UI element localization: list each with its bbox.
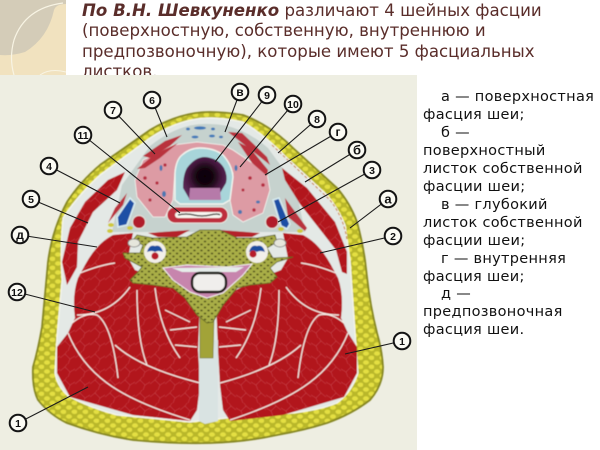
- veins at midline: [186, 126, 223, 138]
- legend text: фасция шеи.: [423, 322, 524, 338]
- jugular vein right: [273, 198, 290, 229]
- corner decoration: [0, 0, 66, 75]
- callout labels: 11: [77, 130, 89, 142]
- legend text: фасция шеи; поверхностный: [423, 107, 546, 159]
- nerves: [107, 223, 303, 233]
- jugular vein left: [117, 198, 135, 227]
- carotid right: [266, 216, 278, 228]
- callout labels: 10: [287, 99, 299, 111]
- callout labels: 1: [15, 418, 21, 430]
- callout labels: 7: [110, 105, 116, 117]
- heading text: (поверхностную, собственную, внутреннюю и: [82, 21, 486, 40]
- trachea: [175, 148, 233, 204]
- foramen left: [144, 241, 166, 263]
- thyroid vessels: [160, 165, 260, 214]
- callout labels: [11, 85, 405, 430]
- callout circles: [9, 84, 410, 431]
- callout labels: 12: [11, 287, 23, 299]
- central visceral compartment: [112, 124, 305, 232]
- callout labels: б: [353, 142, 361, 158]
- callout labels: 6: [149, 95, 155, 107]
- legend text: д —: [441, 286, 471, 302]
- thin orange superficial line: [272, 145, 347, 240]
- spinal cord: [192, 273, 226, 292]
- carotid left: [132, 216, 146, 228]
- legend text: б —: [441, 125, 470, 141]
- subcutaneous fat layer: [33, 112, 383, 443]
- callout labels: 8: [314, 114, 320, 126]
- foramen right: [246, 241, 268, 263]
- thyroid spots: [143, 163, 265, 212]
- callout labels: 5: [28, 194, 34, 206]
- sternocleidomastoid slips: [108, 193, 307, 231]
- back muscles right: [216, 233, 357, 421]
- tracheal lumen: [183, 157, 227, 200]
- legend text: г — внутренняя: [441, 251, 566, 267]
- heading text: По В.Н. Шевкуненко различают 4 шейных фасции: [82, 1, 542, 20]
- spinal canal: [163, 264, 252, 298]
- nuchal ligament: [200, 318, 214, 358]
- heading text: листков.: [82, 62, 157, 81]
- leader lines: [17, 92, 402, 423]
- callout labels: 2: [390, 231, 396, 243]
- canal upper band: [172, 267, 244, 272]
- callout labels: 4: [46, 161, 52, 173]
- neck interior fascia: [55, 118, 358, 422]
- legend text: листок собственной: [423, 161, 583, 177]
- lateral muscle right: [282, 168, 347, 274]
- lateral muscle left: [62, 172, 125, 285]
- vertebra: [123, 230, 293, 323]
- callout labels: в: [236, 85, 244, 99]
- callout labels: 9: [264, 90, 270, 102]
- thyroid gland: [135, 142, 270, 222]
- midline fascia: [199, 340, 218, 424]
- heading text: [82, 1, 542, 81]
- legend text: а — поверхностная: [441, 89, 594, 105]
- lumen lower wall: [189, 188, 221, 200]
- callout labels: а: [384, 192, 392, 206]
- prevertebral slivers: [148, 230, 260, 237]
- back muscles left: [57, 233, 200, 421]
- legend text: в — глубокий: [441, 197, 548, 213]
- callout labels: 3: [369, 165, 375, 177]
- callout labels: д: [16, 228, 24, 242]
- legend text: [423, 89, 594, 338]
- legend text: фасции шеи; листок собственной: [423, 179, 583, 231]
- callout labels: г: [336, 125, 340, 139]
- ganglia: [128, 239, 286, 247]
- panel: neck cross-section diagram: [0, 75, 417, 450]
- strap muscles: [137, 132, 270, 176]
- heading text: предпозвоночную), которые имеют 5 фасциальных: [82, 42, 535, 61]
- callout labels: 1: [399, 336, 405, 348]
- oesophagus: [167, 207, 228, 223]
- legend text: фасции шеи; фасция шеи; предпозвоночная: [423, 233, 563, 320]
